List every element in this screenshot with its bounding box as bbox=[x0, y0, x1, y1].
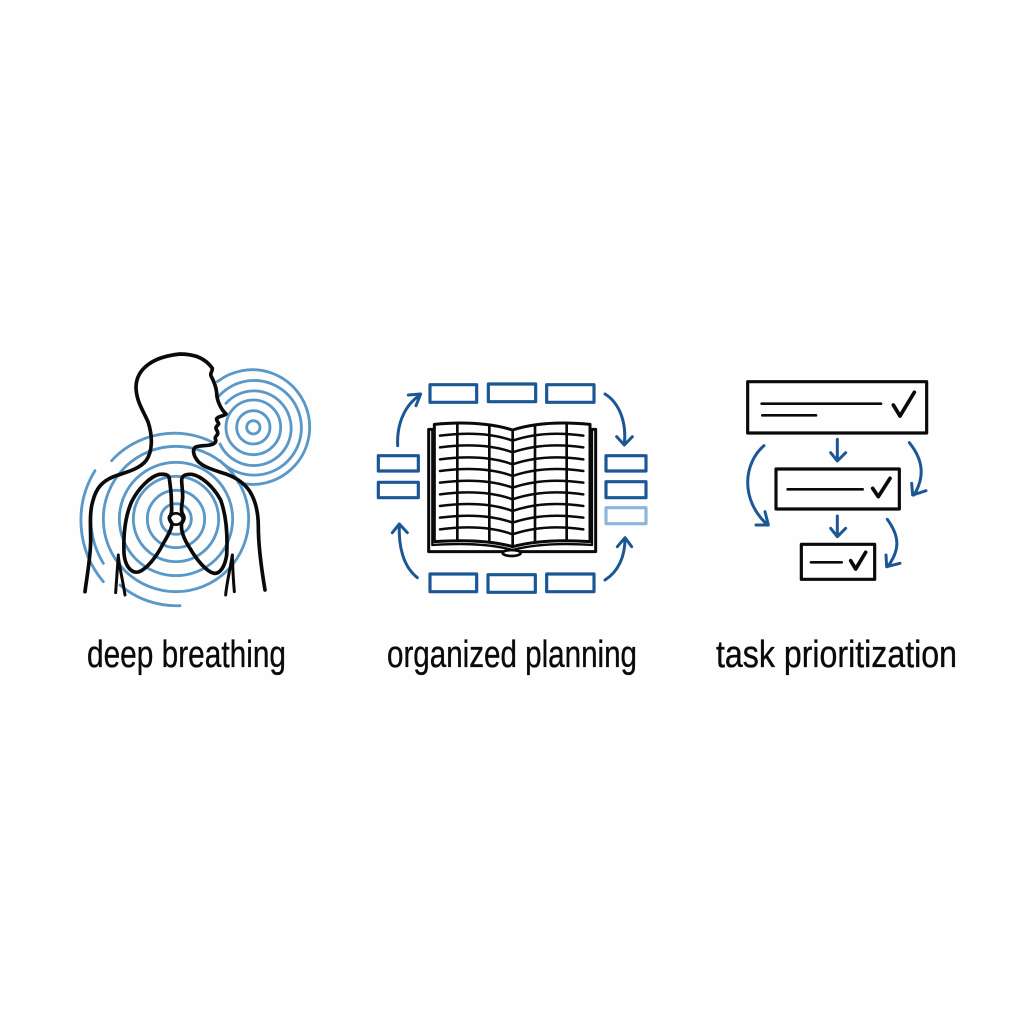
icon: task prioritization flow bbox=[748, 382, 927, 579]
breath rings around the lungs bbox=[81, 433, 249, 606]
task box medium bbox=[776, 469, 899, 509]
left lung bbox=[124, 474, 172, 572]
breath rings near the mouth bbox=[217, 370, 310, 484]
body outline bbox=[85, 354, 265, 592]
cycle arrows bbox=[392, 394, 632, 580]
task box small bbox=[801, 544, 875, 579]
right lung bbox=[181, 474, 227, 573]
arm lines bbox=[116, 555, 234, 595]
schedule blocks bbox=[378, 384, 646, 592]
flow arrows bbox=[748, 439, 926, 567]
task box large bbox=[748, 382, 927, 433]
icon: deep breathing figure bbox=[81, 354, 310, 606]
label: organized planning: organized planning bbox=[387, 634, 637, 676]
label: deep breathing: deep breathing bbox=[87, 634, 286, 676]
icon: organized planning book bbox=[378, 384, 646, 592]
open book bbox=[429, 423, 596, 556]
trachea ring bbox=[169, 513, 183, 525]
label: task prioritization: task prioritization bbox=[716, 634, 957, 676]
